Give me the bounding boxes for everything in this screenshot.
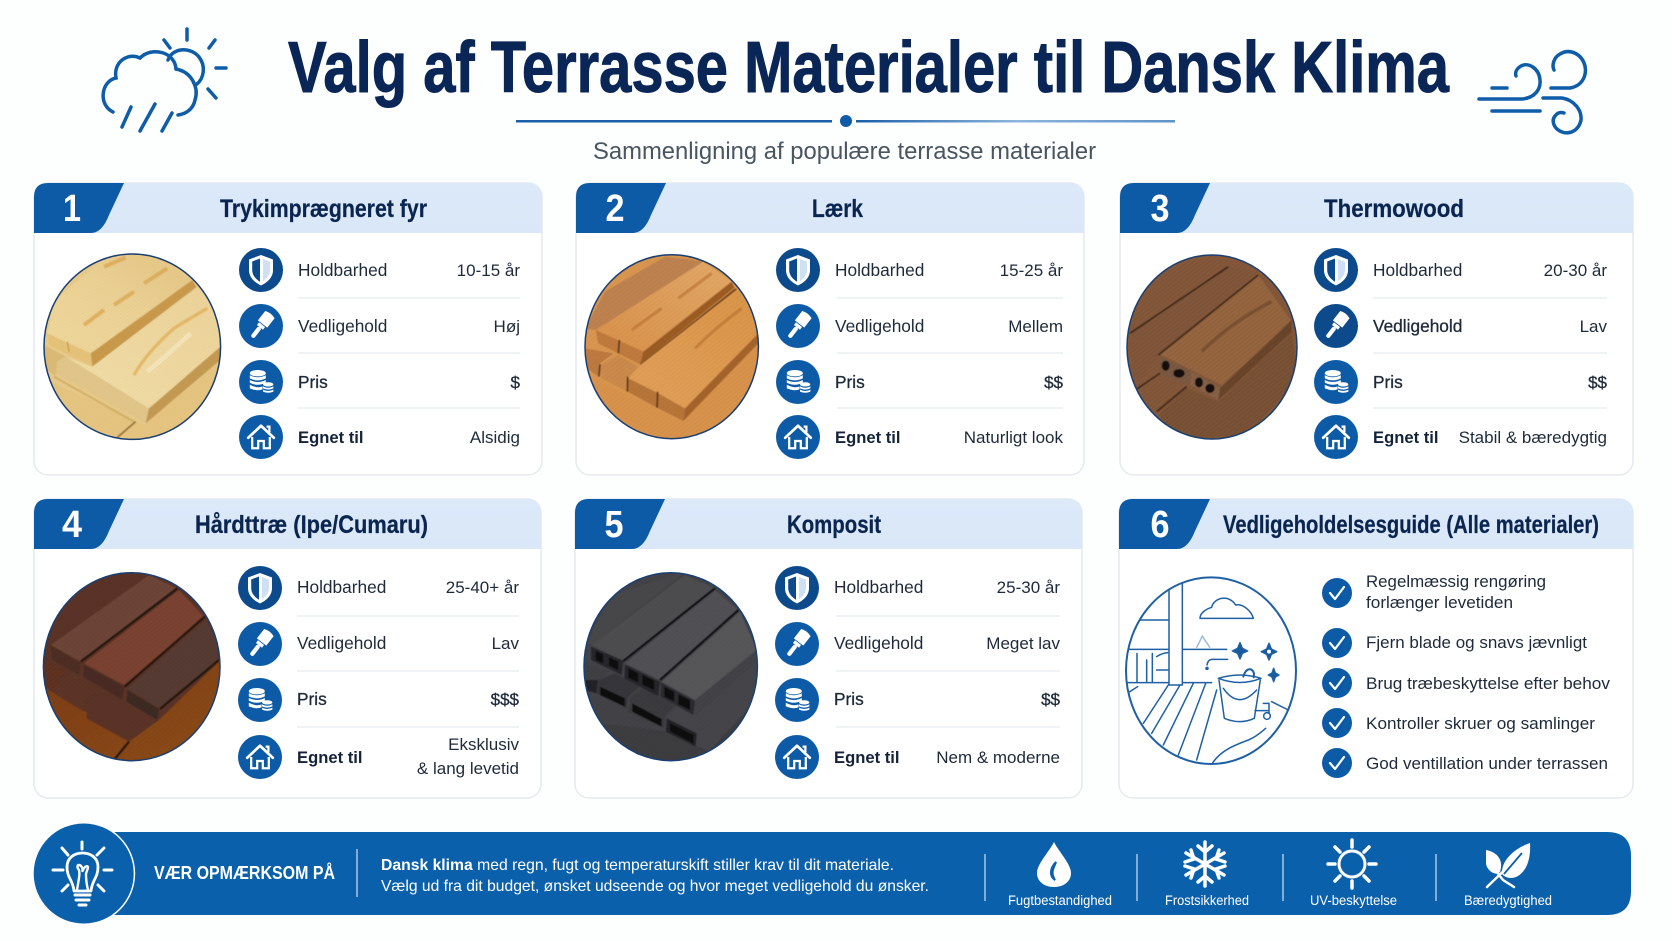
row: Pris: [776, 360, 1064, 404]
photo border: [44, 254, 221, 439]
row: Holdbarhed: Holdbarhed: [1373, 260, 1462, 280]
row: Egnet til: [776, 415, 1063, 459]
row: Vedligehold: [776, 304, 1063, 348]
row: Vedligehold: Vedligehold: [298, 316, 387, 336]
subtitle: Sammenligning af populære terrasse materialer: [593, 138, 1096, 165]
callout text: Vælg ud fra dit budget, ønsket udseende og hvor meget vedligehold du ønsker.: [381, 878, 929, 895]
row: Vedligehold: [239, 304, 520, 348]
badge: UV-beskyttelse: UV-beskyttelse: [1310, 893, 1397, 908]
title rule with dot: [516, 115, 1175, 127]
row: Egnet til: [238, 735, 519, 779]
row: Egnet til: Egnet til: [1373, 428, 1438, 447]
row: Pris: Pris: [297, 689, 327, 709]
row: Holdbarhed: 25-30 år: [997, 578, 1060, 597]
row: Pris: $: [511, 373, 521, 392]
row: Holdbarhed: 25-40+ år: [446, 578, 519, 597]
row: Egnet til: Eksklusiv: [448, 735, 519, 754]
row: Egnet til: Egnet til: [835, 428, 900, 447]
row: Holdbarhed: [238, 566, 519, 610]
heading: Lærk: [812, 195, 863, 223]
number badge 5: [575, 499, 665, 549]
number badge 2: [576, 183, 666, 233]
checklist item: [1322, 748, 1608, 778]
row: Egnet til: [775, 735, 1060, 779]
row: Holdbarhed: Holdbarhed: [835, 260, 924, 280]
checklist item: Regelmæssig rengøring: [1366, 573, 1546, 591]
photo: larch boards: [586, 256, 758, 438]
row: Holdbarhed: 20-30 år: [1544, 261, 1607, 280]
checklist item: Fjern blade og snavs jævnligt: [1366, 634, 1587, 652]
photo: hardwood boards: [44, 574, 220, 760]
photo border: [43, 573, 220, 761]
row: Pris: $$: [1044, 373, 1064, 392]
icon: light bulb: [32, 822, 135, 925]
row: Egnet til: Stabil & bæredygtig: [1459, 428, 1607, 447]
row: Holdbarhed: [239, 248, 520, 292]
number badge 3: 3: [1150, 188, 1170, 230]
number badge 3: [1120, 183, 1210, 233]
panel: 6 Vedligeholdelsesguide: [1119, 499, 1633, 798]
row: Pris: Pris: [834, 689, 864, 709]
photo border: [584, 573, 757, 761]
row: Holdbarhed: 15-25 år: [1000, 261, 1063, 280]
row: Egnet til: & lang levetid: [417, 759, 519, 778]
checklist item: Brug træbeskyttelse efter behov: [1366, 675, 1611, 693]
row: Vedligehold: Meget lav: [986, 634, 1060, 653]
badge: Frostsikkerhed: [1165, 842, 1249, 908]
row: Vedligehold: Vedligehold: [834, 633, 923, 653]
row: Pris: [239, 360, 521, 404]
row: Vedligehold: Lav: [492, 634, 519, 653]
photo: composite boards: [584, 574, 757, 760]
checklist item: [1322, 708, 1596, 738]
badge: Bæredygtighed: [1464, 843, 1552, 908]
number badge 6: 6: [1150, 504, 1170, 546]
number badge 4: [34, 499, 124, 549]
checklist item: [1322, 628, 1587, 658]
number badge 1: [34, 183, 124, 233]
row: Pris: $$$: [491, 690, 520, 709]
row: Pris: Pris: [1373, 372, 1403, 392]
row: Egnet til: Naturligt look: [964, 428, 1063, 447]
row: Pris: [238, 678, 520, 722]
photo: pine boards: [44, 254, 220, 439]
row: Egnet til: Egnet til: [298, 428, 363, 447]
checklist item: God ventillation under terrassen: [1366, 755, 1608, 773]
row: Egnet til: Nem & moderne: [936, 748, 1060, 767]
row: Pris: [1314, 360, 1608, 404]
checklist item: Kontroller skruer og samlinger: [1366, 715, 1596, 733]
illustration: terrace cleaning: [1126, 577, 1296, 764]
icon: wind: [1479, 52, 1585, 133]
row: Vedligehold: [775, 622, 1060, 666]
row: Holdbarhed: Holdbarhed: [298, 260, 387, 280]
row: Holdbarhed: 10-15 år: [457, 261, 520, 280]
row: Egnet til: Egnet til: [834, 748, 899, 767]
photo: thermowood decking: [1128, 256, 1296, 438]
row: Holdbarhed: Holdbarhed: [297, 577, 386, 597]
photo border: [1127, 255, 1297, 439]
checklist item: [1322, 573, 1546, 612]
panel: 1 Trykimprægneret fyr: [34, 183, 542, 475]
row: Vedligehold: Vedligehold: [835, 316, 924, 336]
number badge 2: 2: [606, 188, 624, 230]
row: Pris: $$: [1041, 690, 1061, 709]
row: Pris: Pris: [298, 372, 328, 392]
row: Holdbarhed: [775, 566, 1060, 610]
row: Vedligehold: Høj: [494, 317, 520, 336]
badge: Fugtbestandighed: [1008, 842, 1112, 908]
panel: 2 Lærk: [575, 183, 1084, 475]
number badge 1: 1: [63, 188, 81, 230]
badge: Fugtbestandighed: Fugtbestandighed: [1008, 893, 1112, 908]
row: Egnet til: Egnet til: [297, 748, 362, 767]
photo border: [585, 255, 758, 439]
heading: Hårdttræ (Ipe/Cumaru): [195, 511, 428, 539]
row: Vedligehold: Vedligehold: [1373, 316, 1462, 336]
row: Holdbarhed: [776, 248, 1063, 292]
panel: 5 Komposit: [575, 499, 1082, 798]
badge: Bæredygtighed: Bæredygtighed: [1464, 893, 1552, 908]
heading: Thermowood: [1324, 195, 1464, 223]
badge: UV-beskyttelse: [1310, 840, 1397, 908]
panel: 3 Thermowood: [1115, 183, 1633, 475]
callout text: Dansk klima med regn, fugt og temperaturskift stiller krav til dit materiale.: [381, 857, 894, 874]
row: Pris: Pris: [835, 372, 865, 392]
number badge 6: [1119, 499, 1210, 549]
callout text: [381, 857, 929, 895]
badge: Frostsikkerhed: Frostsikkerhed: [1165, 893, 1249, 908]
row: Vedligehold: Lav: [1580, 317, 1607, 336]
row: Egnet til: Alsidig: [470, 428, 520, 447]
row: Holdbarhed: [1314, 248, 1607, 292]
row: Egnet til: [239, 415, 520, 459]
panel: bottom banner: [32, 822, 1631, 925]
row: Vedligehold: Mellem: [1008, 317, 1063, 336]
row: Vedligehold: [1314, 304, 1607, 348]
row: Vedligehold: [238, 622, 519, 666]
row: Holdbarhed: Holdbarhed: [834, 577, 923, 597]
row: Vedligehold: Vedligehold: [297, 633, 386, 653]
heading: Komposit: [787, 511, 882, 539]
icon: rain cloud and sun: [103, 29, 226, 131]
row: Pris: [775, 678, 1061, 722]
heading: Trykimprægneret fyr: [220, 195, 427, 223]
number badge 5: 5: [604, 504, 624, 546]
panel: 4 Hårdttræ: [34, 499, 541, 798]
checklist item: [1322, 668, 1611, 698]
row: Pris: $$: [1588, 373, 1608, 392]
number badge 4: 4: [62, 504, 82, 546]
callout label: VÆR OPMÆRKSOM PÅ: [154, 863, 335, 883]
row: Egnet til: [1314, 415, 1607, 459]
checklist item: forlænger levetiden: [1366, 594, 1513, 612]
